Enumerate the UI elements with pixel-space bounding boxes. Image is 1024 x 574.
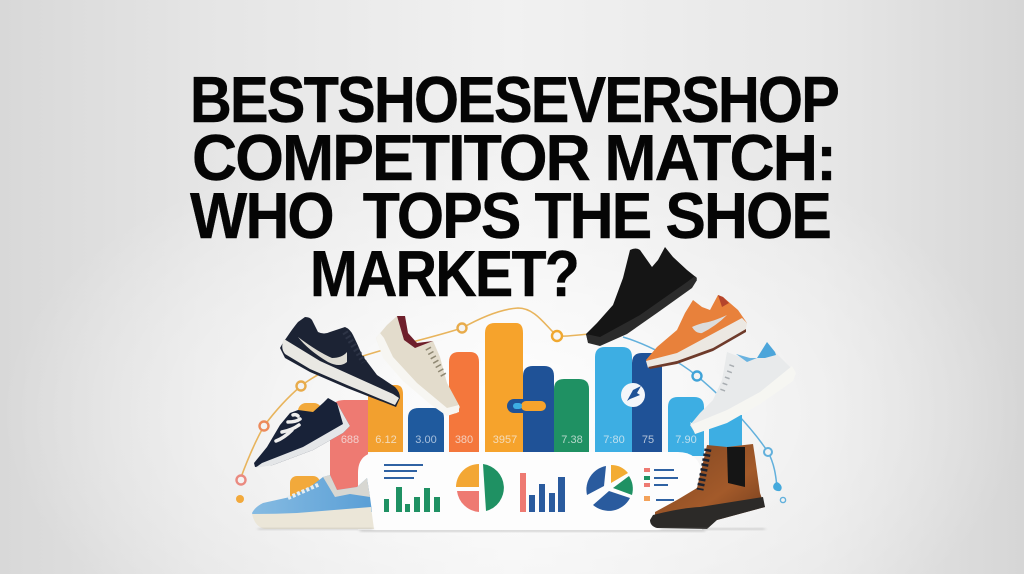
shoe: navy low-top — [254, 398, 350, 468]
small bar chart: blue — [520, 473, 565, 512]
bar value labels: 688 — [341, 434, 359, 446]
bar value labels — [341, 434, 697, 446]
bar value labels: 7:80 — [603, 434, 625, 446]
shoe: black sneaker — [586, 247, 697, 346]
legend — [644, 468, 678, 501]
trend line: blue — [623, 337, 786, 503]
bar value labels: 6.12 — [375, 434, 397, 446]
trend line: gold — [236, 308, 590, 503]
title — [190, 63, 839, 310]
shoe: white sneaker — [690, 342, 796, 434]
small bar chart: green — [384, 487, 440, 512]
bar value labels: 7.90 — [675, 434, 697, 446]
shoe: brown chelsea boot — [650, 444, 765, 530]
icon: badge — [621, 383, 645, 407]
pie chart: segments — [586, 465, 633, 511]
bar value labels: 3957 — [493, 434, 517, 446]
shoe: navy sneaker with swoosh — [280, 317, 400, 407]
title: WHO TOPS THE SHOE — [190, 179, 830, 252]
bar value labels: 380 — [455, 434, 473, 446]
shoe: light blue sneaker — [252, 475, 374, 530]
title: BESTSHOESEVERSHOP — [190, 63, 839, 136]
bar value labels: 75 — [642, 434, 654, 446]
shoe: orange sneaker with swoosh — [646, 295, 747, 369]
title: COMPETITOR MATCH: — [192, 121, 835, 194]
panel: dashboard — [358, 452, 705, 532]
bar value labels: 3.00 — [415, 434, 437, 446]
text lines — [384, 464, 423, 479]
icon: toggle pill — [507, 399, 547, 413]
shoe: cream sneaker — [376, 316, 460, 416]
title: MARKET? — [310, 237, 578, 310]
bar chart — [290, 323, 742, 506]
bar value labels: 7.38 — [561, 434, 583, 446]
pie chart: quarters — [456, 464, 504, 512]
